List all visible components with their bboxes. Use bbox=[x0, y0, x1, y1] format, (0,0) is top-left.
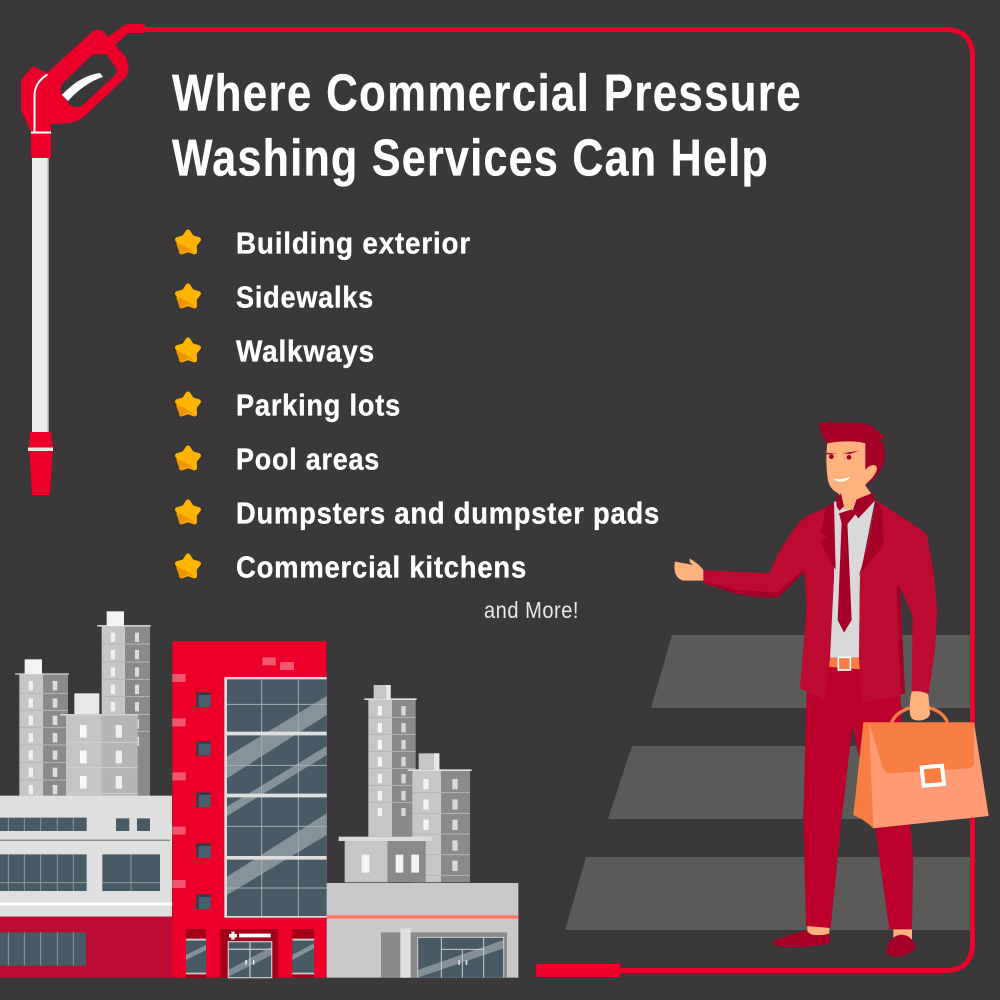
upper body and head bbox=[674, 422, 937, 710]
item: Commercial kitchens: Commercial kitchens bbox=[236, 550, 527, 584]
title: Where Commercial Pressure bbox=[172, 64, 802, 122]
checklist of service areas bbox=[176, 226, 660, 584]
item: Walkways: Walkways bbox=[236, 334, 375, 368]
red glass office building bbox=[172, 641, 327, 978]
item: Sidewalks bbox=[176, 280, 374, 314]
city buildings: right group bbox=[327, 685, 518, 978]
city buildings: left group bbox=[0, 611, 173, 978]
item: Building exterior: Building exterior bbox=[236, 226, 471, 260]
small rooftop block bbox=[339, 837, 432, 882]
trousers and shoes bbox=[773, 667, 915, 957]
tower right bbox=[408, 753, 472, 882]
briefcase bbox=[853, 691, 989, 828]
item: Pool areas: Pool areas bbox=[236, 442, 380, 476]
title: Washing Services Can Help bbox=[172, 130, 769, 188]
floor stripes bbox=[565, 635, 970, 930]
grey storefront bbox=[327, 883, 518, 978]
businessman with briefcase bbox=[674, 422, 989, 957]
item: Sidewalks: Sidewalks bbox=[236, 280, 374, 314]
item: Parking lots: Parking lots bbox=[236, 388, 401, 422]
front mid-rise bbox=[60, 693, 138, 797]
title bbox=[172, 64, 802, 188]
tall grey tower bbox=[97, 611, 151, 797]
low white and red building bbox=[0, 796, 173, 978]
second grey tower bbox=[15, 659, 69, 797]
tower behind bbox=[364, 685, 417, 837]
hose frame bbox=[145, 30, 972, 977]
item: Dumpsters and dumpster pads: Dumpsters and dumpster pads bbox=[236, 496, 660, 530]
item: Pool areas bbox=[176, 442, 380, 476]
item: Parking lots bbox=[176, 388, 401, 422]
and more note: and More! bbox=[484, 597, 579, 623]
icon: pressure washer nozzle and wand bbox=[21, 24, 145, 495]
item: Walkways bbox=[176, 334, 375, 368]
